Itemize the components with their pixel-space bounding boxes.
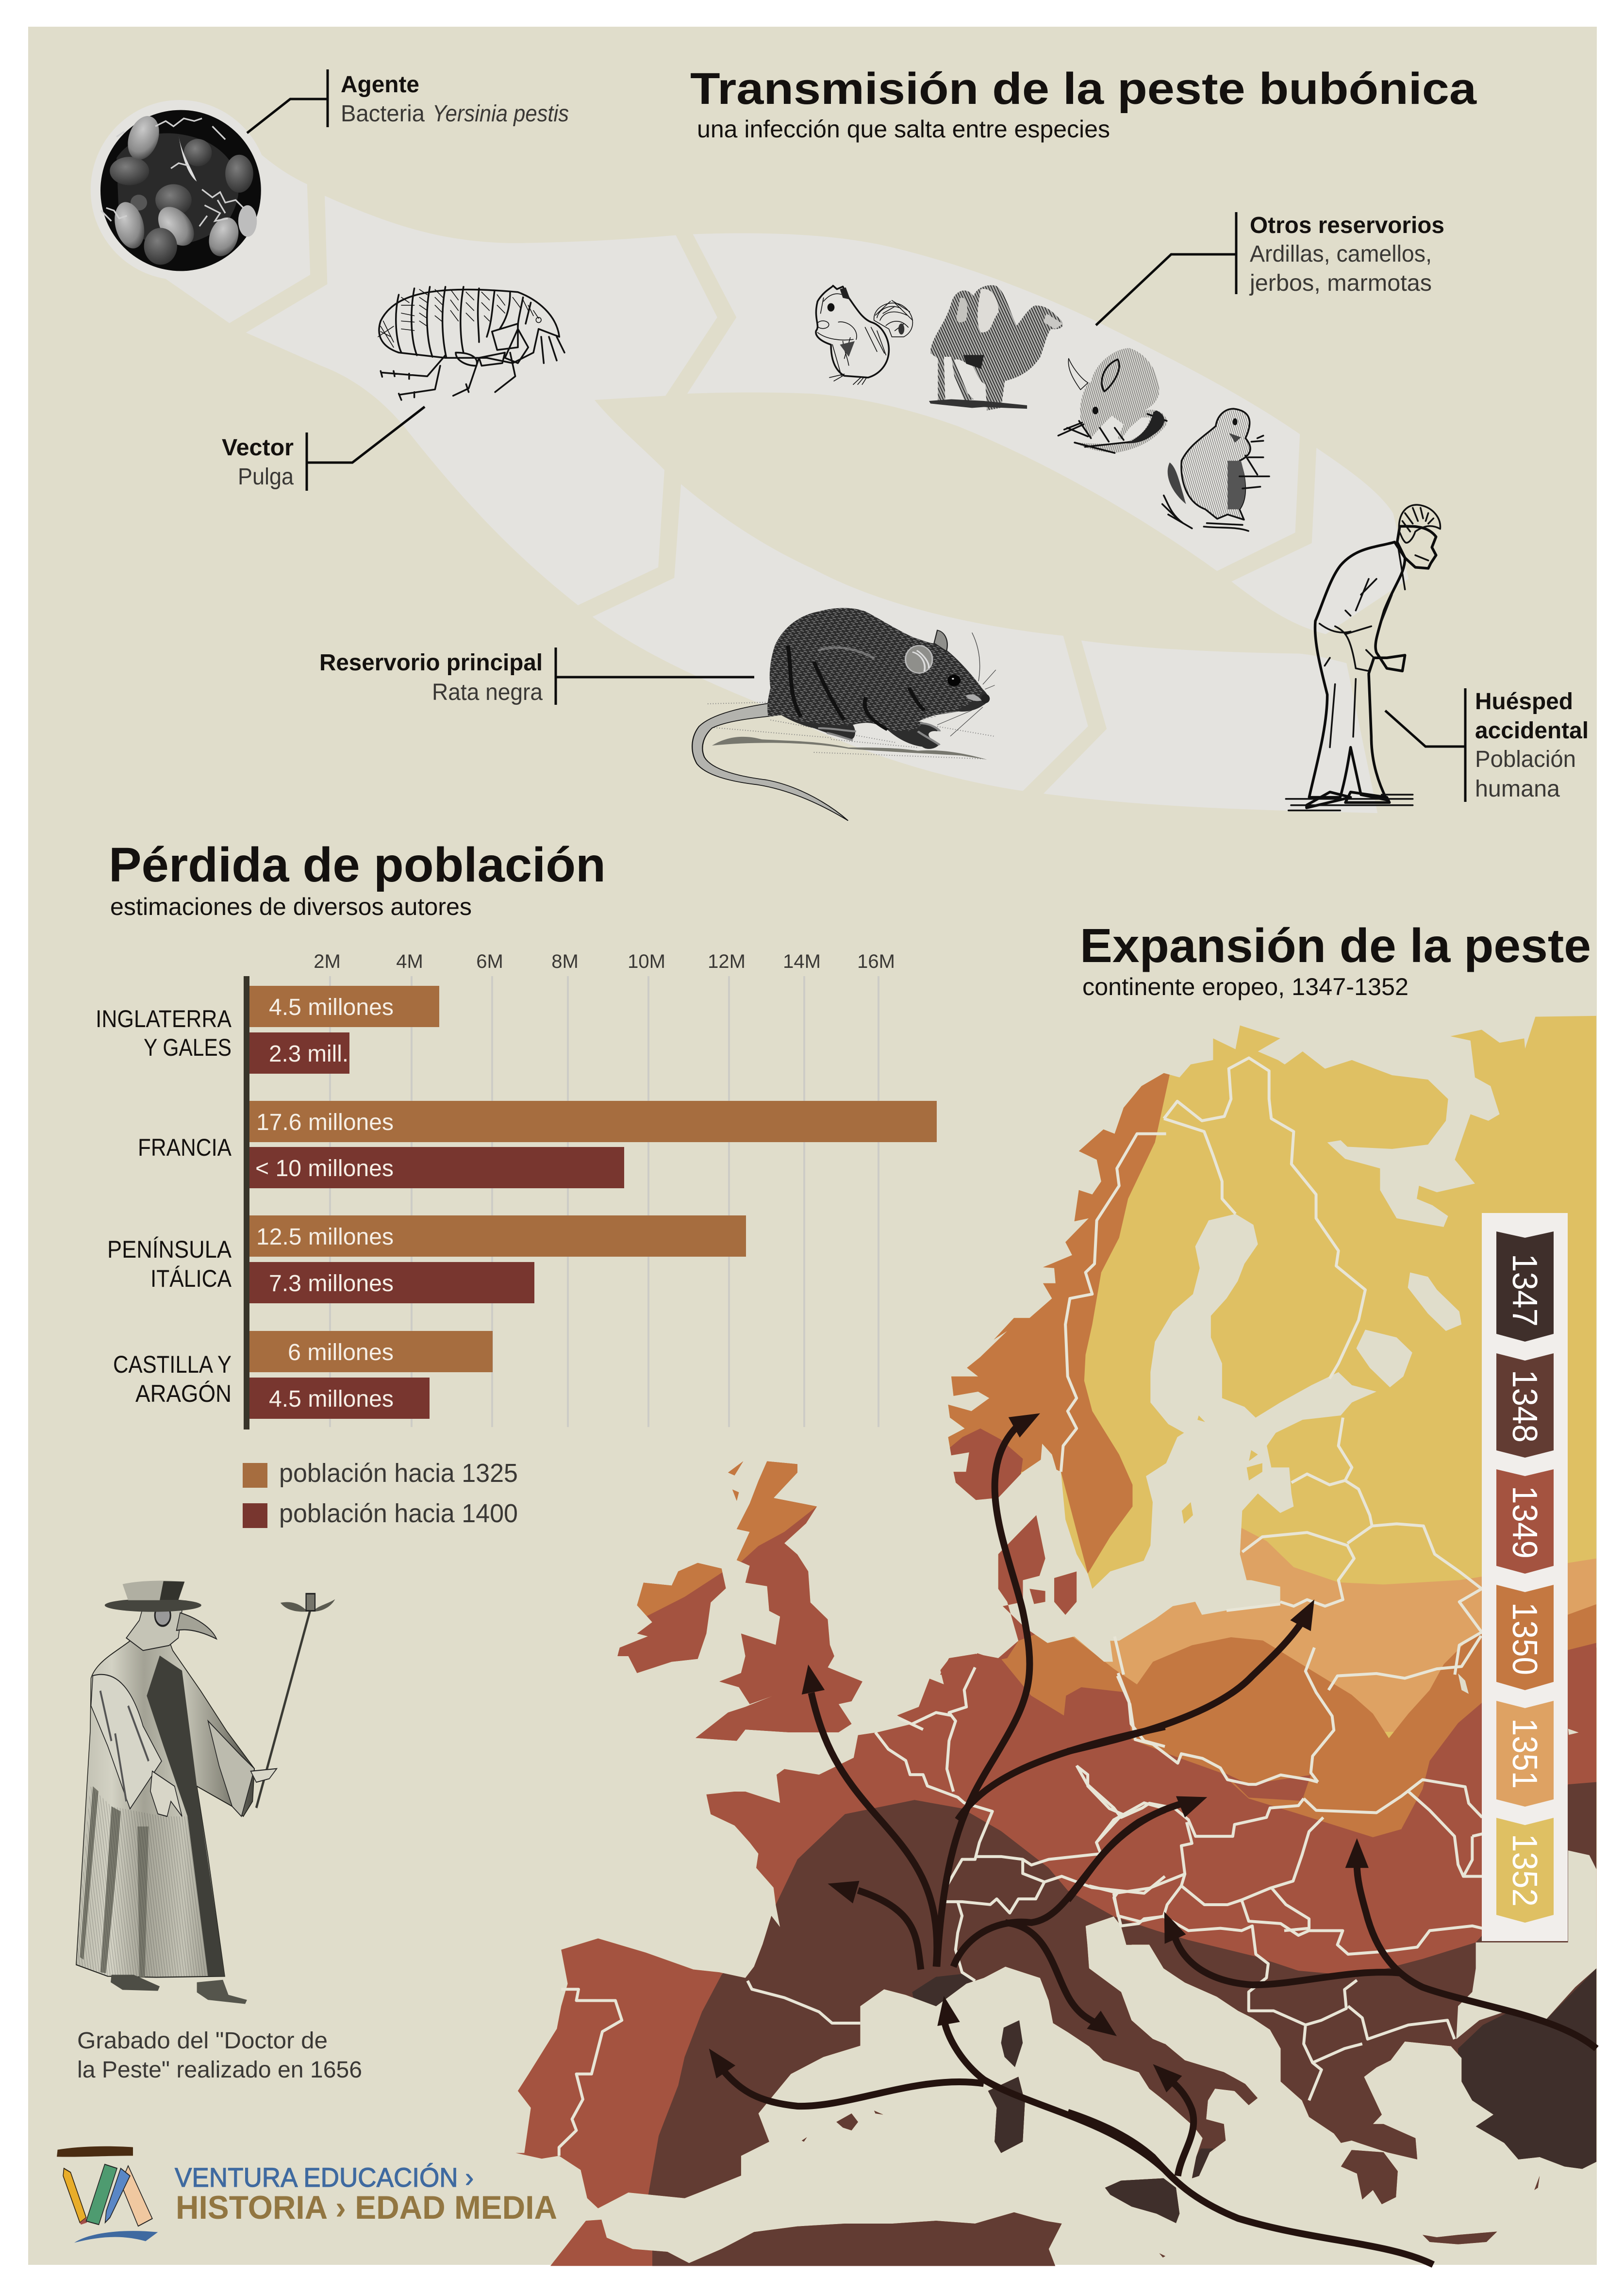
bars: Península Itálica [249, 1215, 746, 1303]
ground [712, 737, 987, 760]
grid lines and tick labels: 16M [857, 951, 895, 972]
head [1397, 526, 1436, 568]
heading: Pérdida de población: Pérdida de población [109, 838, 606, 892]
caption: doctor engraving [77, 2028, 362, 2083]
label: Agente: Agente [341, 72, 419, 98]
label: Reservorio principal: Rata negra [432, 680, 543, 705]
hood, mask and beak [126, 1600, 182, 1650]
icon: hunched man [1286, 505, 1440, 811]
arrow segment: rat reservoir to human [1044, 640, 1377, 813]
arrow: to Norway [937, 1413, 1040, 1967]
arrow: to Dalmatia [1164, 1912, 1401, 1985]
bars: Castilla y Aragón: 4.5 millones [269, 1386, 394, 1412]
year chip: 1349 [1496, 1469, 1554, 1574]
year chip: 1351 [1496, 1701, 1554, 1807]
staff [256, 1610, 310, 1808]
title: Transmisión de la peste bubónica [690, 64, 1477, 114]
logo text [175, 2162, 557, 2226]
category labels [96, 1005, 232, 1407]
country borders [559, 1058, 1482, 2156]
category labels: ITÁLICA [150, 1265, 232, 1292]
grid lines and tick labels: 2M [314, 951, 341, 972]
year chip: 1352: 1352 [1505, 1834, 1544, 1907]
bars: Castilla y Aragón [249, 1331, 493, 1419]
label: Huésped accidental: accidental [1475, 718, 1589, 744]
category labels: ARAGÓN [135, 1380, 232, 1407]
arrow segment: flea to other reservoirs [687, 233, 1300, 571]
arrow: Black Sea to Hungary [1345, 1838, 1596, 2048]
category labels: Y GALES [144, 1034, 232, 1061]
arrow segment: agent to vector [130, 133, 310, 323]
year chip: 1349: 1349 [1505, 1486, 1544, 1559]
arrow: to Poland [958, 1599, 1314, 1820]
1352 band [485, 995, 1597, 2265]
icon: flea [378, 287, 564, 400]
label: Huésped accidental: Población [1475, 747, 1576, 772]
heading: Pérdida de población [109, 838, 606, 920]
arrow: to England [802, 1664, 937, 1967]
shoes [111, 1975, 160, 1991]
logo icon [57, 2146, 158, 2243]
year legend panel [1482, 1213, 1568, 1941]
year chip: 1348 [1496, 1353, 1554, 1458]
arrow: to central Europe [953, 1796, 1207, 1967]
arrow: to western France [828, 1881, 921, 1969]
arrow: Mediterranean route to Marseille [937, 1996, 1165, 2170]
1347 band [912, 1968, 1596, 2228]
category labels: FRANCIA [138, 1134, 232, 1161]
year chip: 1347: 1347 [1505, 1254, 1544, 1327]
bar chart: population loss [96, 951, 937, 1429]
1348 band [647, 1782, 1596, 2293]
label: Otros reservorios [1096, 212, 1444, 325]
year chip: 1350: 1350 [1505, 1602, 1544, 1675]
icon: camel [929, 285, 1063, 411]
category labels: INGLATERRA [96, 1005, 232, 1032]
map colour bands by year [464, 995, 1597, 2293]
label: Vector [222, 407, 425, 491]
heading: Expansión de la peste: Expansión de la peste [1080, 919, 1591, 972]
title [690, 64, 1477, 143]
label: Vector: Vector [222, 435, 294, 461]
grid lines and tick labels: 14M [783, 951, 821, 972]
diagram: transmission arrows [130, 133, 1409, 813]
label: Huésped accidental: humana [1475, 776, 1560, 802]
1351 band [1057, 1526, 1596, 1732]
subheading: estimaciones de diversos autores [110, 893, 472, 920]
logo text: HISTORIA › EDAD MEDIA [176, 2189, 557, 2226]
caption: doctor engraving: la Peste" realizado en 1656 [77, 2057, 362, 2083]
bars: Castilla y Aragón: 6 millones [288, 1340, 394, 1365]
1350 patches over Britain and Ireland; 1349 patch over Hungary [629, 1442, 1311, 1801]
icon: squirrel [816, 286, 912, 384]
label: Reservorio principal [319, 648, 754, 705]
bars: Inglaterra y Gales: 2.3 mill. [269, 1041, 348, 1067]
icon: marmot [1162, 409, 1269, 531]
bars: Inglaterra y Gales [249, 986, 439, 1074]
map: plague expansion over Europe [464, 995, 1597, 2293]
caption: doctor engraving: Grabado del "Doctor de [77, 2028, 328, 2054]
label: Huésped accidental: Huésped [1475, 689, 1573, 714]
ground and shoes [1307, 792, 1390, 808]
1350 band [922, 1060, 1596, 1930]
year chip: 1350 [1496, 1585, 1554, 1690]
ears, eye, nose, whiskers [906, 646, 932, 673]
1349 band [464, 1429, 1596, 2293]
icon: jerboa [1058, 348, 1167, 453]
chart legend: población hacia 1325 [279, 1459, 518, 1488]
label: Agente: Yersinia pestis [432, 101, 569, 127]
hands [150, 1771, 182, 1816]
arrow: to Spain [709, 2048, 984, 2106]
label: Huésped accidental [1385, 688, 1589, 802]
axis [244, 976, 249, 1429]
chart legend: población hacia 1400 [279, 1499, 518, 1528]
grid lines and tick labels: 6M [476, 951, 503, 972]
arrow: Sicily to Naples [1153, 2064, 1193, 2176]
label: Agente: Bacteria [341, 101, 425, 127]
bars: Península Itálica: 12.5 millones [256, 1224, 394, 1250]
hat [105, 1599, 201, 1612]
arrow segment: reservoirs to human [1231, 448, 1409, 634]
inland seas and lakes [1357, 1272, 1596, 2039]
heading: Expansión de la peste [1080, 919, 1591, 1000]
label: Agente [247, 69, 569, 133]
year chip: 1352 [1496, 1818, 1554, 1923]
icon: black rat [692, 608, 996, 821]
label: Vector: Pulga [238, 464, 294, 490]
grid lines and tick labels: 12M [708, 951, 746, 972]
body [767, 608, 989, 749]
arrow: eastern Mediterranean sea route [1068, 2112, 1433, 2264]
chart legend [243, 1459, 518, 1528]
island: Corsica [1001, 2020, 1023, 2067]
label: Reservorio principal: Reservorio principal [319, 650, 543, 676]
arrow: down Italy [1005, 1923, 1117, 2036]
grid lines and tick labels: 10M [628, 951, 665, 972]
grid lines and tick labels: 8M [551, 951, 579, 972]
illustration: plague doctor engraving [76, 1581, 335, 2004]
year chip: 1347 [1496, 1231, 1554, 1342]
label: Otros reservorios: Ardillas, camellos, [1250, 241, 1432, 267]
tail [692, 703, 848, 821]
logo text: VENTURA EDUCACIÓN › [175, 2162, 474, 2193]
label: Otros reservorios: jerbos, marmotas [1249, 270, 1432, 296]
bars: Península Itálica: 7.3 millones [269, 1271, 394, 1296]
grid lines and tick labels: 4M [396, 951, 423, 972]
arrow segment: vector to rat [246, 196, 717, 605]
bars: Francia [249, 1101, 937, 1188]
body [1309, 542, 1405, 800]
category labels: PENÍNSULA [107, 1236, 232, 1263]
bars: Francia: 17.6 millones [256, 1110, 394, 1135]
category labels: CASTILLA Y [113, 1351, 232, 1378]
year chip: 1348: 1348 [1505, 1370, 1544, 1443]
grid lines and tick labels [314, 951, 895, 1427]
spread arrows [709, 1413, 1596, 2264]
bars: Francia: < 10 millones [255, 1156, 394, 1181]
icon: bacteria micrograph [91, 100, 269, 280]
label: Otros reservorios: Otros reservorios [1250, 213, 1444, 238]
subtitle: una infección que salta entre especies [697, 116, 1110, 143]
bars: Inglaterra y Gales: 4.5 millones [269, 995, 394, 1020]
subheading: continente eropeo, 1347-1352 [1082, 973, 1409, 1000]
year chip: 1351: 1351 [1505, 1718, 1544, 1789]
coat [76, 1638, 254, 1977]
arrow segment: rat to human [593, 484, 1088, 791]
